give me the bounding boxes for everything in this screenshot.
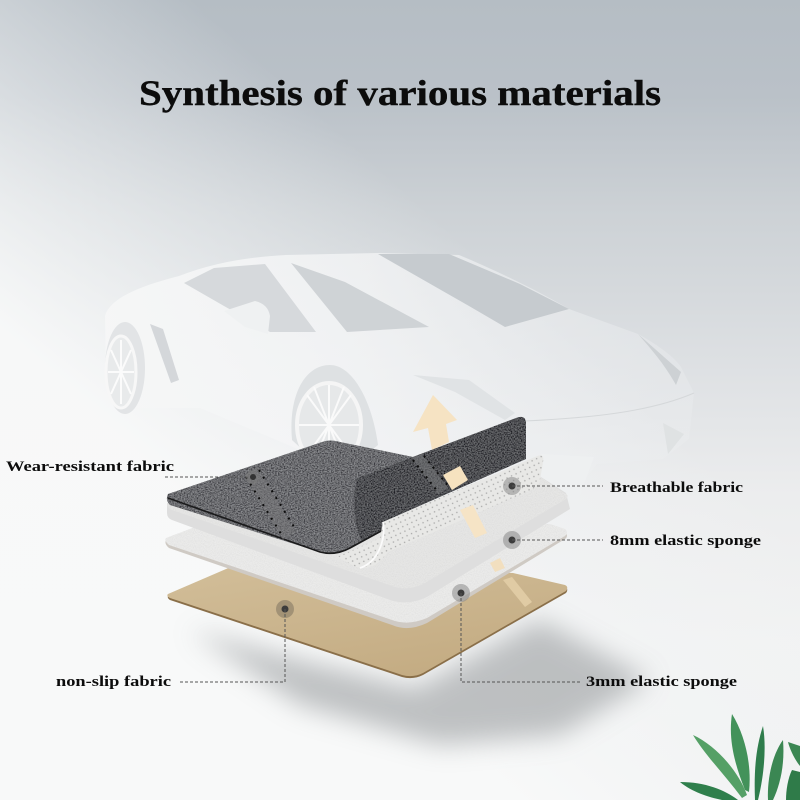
title: Synthesis of various materials (139, 73, 661, 113)
stitched seam front (244, 467, 296, 540)
plant leaves (680, 714, 800, 800)
car side window (184, 264, 316, 332)
callout: 8mm elastic sponge: 8mm elastic sponge (610, 533, 762, 549)
leaf (693, 735, 747, 798)
layer: tan non-slip fabric (167, 566, 567, 678)
rear wheel (105, 322, 145, 414)
callout: wear-resistant fabric (6, 459, 260, 484)
front intake (541, 454, 594, 503)
layer: 8mm elastic sponge (167, 470, 570, 602)
callout: 8mm elastic sponge (503, 531, 762, 549)
callout: wear-resistant fabric: Wear-resistant fabric (6, 459, 175, 475)
callout: 3mm elastic sponge: 3mm elastic sponge (586, 674, 738, 690)
arrow fragment lower (490, 558, 505, 572)
faded car (105, 253, 694, 503)
front vent (663, 423, 684, 454)
car windshield right (378, 254, 569, 327)
car body (105, 253, 694, 503)
leather bottom edge (168, 498, 383, 553)
callout: non-slip fabric (56, 600, 294, 690)
leaf (768, 740, 783, 800)
callout: 3mm elastic sponge (452, 584, 738, 690)
layered material stack (165, 395, 650, 745)
arrow fragment on tan (503, 577, 532, 607)
arrow fragment on flap (443, 466, 468, 490)
shadow under stack (190, 620, 650, 745)
leaf (731, 714, 750, 792)
callout: breathable fabric: Breathable fabric (610, 480, 744, 496)
upward arrow (413, 395, 457, 450)
layer: 3mm elastic sponge (165, 524, 567, 628)
arrow fragment on fabric (460, 505, 487, 538)
callout: non-slip fabric: non-slip fabric (56, 674, 172, 690)
stitched seam back (412, 454, 449, 494)
car windshield (291, 263, 429, 332)
layer: black leather flap (354, 417, 526, 542)
layer: black leather fabric (167, 440, 413, 553)
front wheel (291, 365, 378, 480)
leaf (680, 782, 738, 800)
leaf (786, 770, 800, 800)
callout: breathable fabric (503, 477, 744, 496)
car side vent (150, 324, 179, 383)
layer: breathable fabric (337, 455, 543, 568)
hood accent (638, 334, 681, 385)
leaf (755, 726, 765, 800)
car mirror (224, 301, 270, 334)
headlight (413, 375, 515, 420)
leaf (788, 742, 800, 766)
